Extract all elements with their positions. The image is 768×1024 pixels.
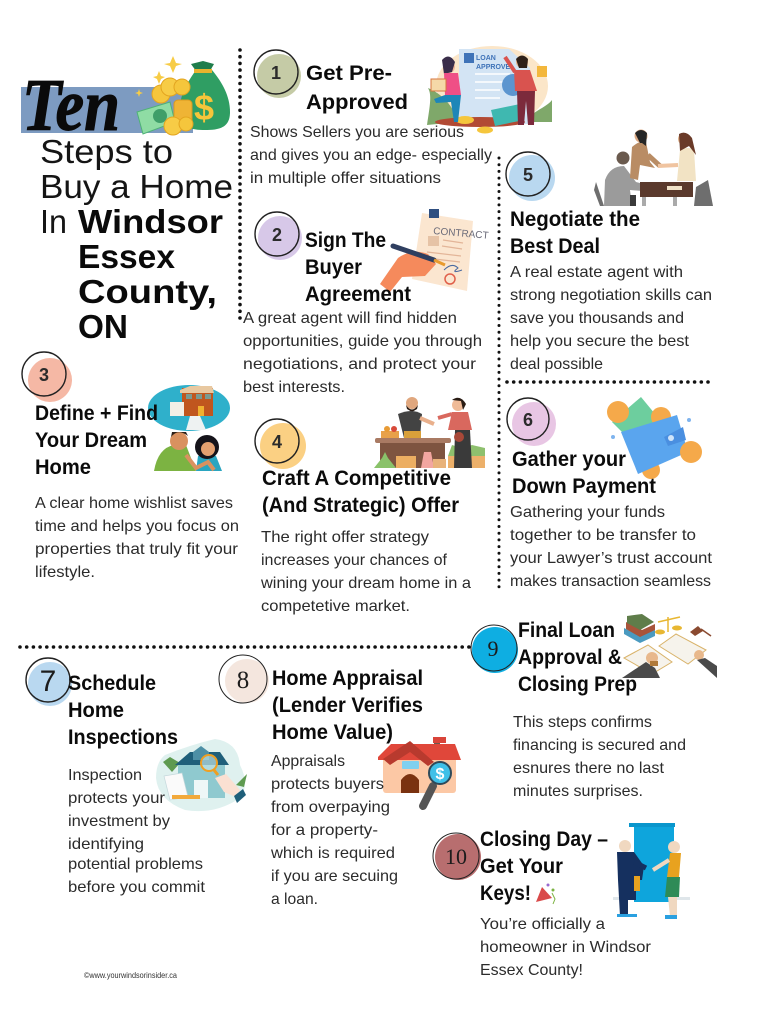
panel: step 6 <box>507 397 713 590</box>
body text: for a property- <box>271 822 378 839</box>
panel: title <box>21 56 233 345</box>
body text: strong negotiation skills can <box>510 287 712 304</box>
icon: handing over keys at the front door <box>613 823 690 919</box>
icon: party popper <box>536 884 555 904</box>
title text regular: In <box>40 203 67 240</box>
number badge 3 <box>22 352 72 402</box>
body text: potential problems <box>68 856 203 873</box>
icon: market stall negotiation <box>374 397 485 468</box>
heading <box>305 229 411 306</box>
body text: protects your <box>68 790 166 807</box>
icon: couple dreaming of a home <box>148 385 230 471</box>
title text regular: Steps to <box>40 133 173 170</box>
icon: wallet with coins and cash <box>607 397 702 479</box>
icon: legal documents, scales and gavel <box>622 614 717 678</box>
body text: your Lawyer’s trust account <box>510 550 713 567</box>
panel: step 2 <box>243 209 489 396</box>
body text <box>510 504 713 590</box>
panel: step 4 <box>255 397 485 615</box>
panel: step 3 <box>22 352 239 581</box>
heading: Schedule <box>68 672 156 695</box>
heading: Final Loan <box>518 619 615 642</box>
body text: increases your chances of <box>261 552 448 569</box>
panel: step 1 <box>250 46 552 187</box>
body text <box>510 264 712 373</box>
heading: Closing Prep <box>518 673 637 696</box>
body text: investment by <box>68 813 170 830</box>
heading: Best Deal <box>510 235 600 258</box>
body text: financing is secured and <box>513 737 686 754</box>
body text <box>513 714 686 800</box>
heading: Home <box>35 456 91 479</box>
heading: Define + Find <box>35 402 158 425</box>
heading <box>512 448 656 498</box>
body text: deal possible <box>510 356 603 373</box>
number badge 5 <box>506 152 555 201</box>
panel: step 10 <box>433 823 690 979</box>
body text: a loan. <box>271 891 318 908</box>
panel: step 7 <box>26 658 247 896</box>
icon: money bag and coins <box>135 56 230 135</box>
body text: Inspection <box>68 767 142 784</box>
heading: Craft A Competitive <box>262 467 451 490</box>
body text: and gives you an edge- especially <box>250 147 492 164</box>
body text: time and helps you focus on <box>35 518 239 535</box>
body text: You’re officially a <box>480 916 605 933</box>
body text <box>260 529 471 615</box>
body text <box>68 767 206 896</box>
heading: Down Payment <box>512 475 656 498</box>
number badge 9: 9 <box>488 636 498 661</box>
heading: Inspections <box>68 726 178 749</box>
heading: Your Dream <box>35 429 147 452</box>
heading: (And Strategic) Offer <box>262 494 459 517</box>
body text: Shows Sellers you are serious <box>250 124 464 141</box>
title text regular: Buy a Home <box>40 168 233 205</box>
heading <box>480 828 608 905</box>
heading: Buyer <box>305 256 362 279</box>
body text <box>270 753 398 908</box>
body text <box>35 495 239 581</box>
body text: competetive market. <box>261 598 410 615</box>
number badge 2: 2 <box>272 225 282 245</box>
title text bold location <box>78 203 223 345</box>
number badge 9 <box>471 625 518 673</box>
body text: which is required <box>270 845 395 862</box>
body text: help you secure the best <box>510 333 690 350</box>
footer website credit: ©www.yourwindsorinsider.ca <box>84 971 177 980</box>
number badge 4 <box>255 419 306 469</box>
heading: Gather your <box>512 448 626 471</box>
heading: Approval & <box>518 646 622 669</box>
heading <box>35 402 158 479</box>
body text: homeowner in Windsor <box>480 939 652 956</box>
body text: minutes surprises. <box>513 783 643 800</box>
body text: Appraisals <box>271 753 345 770</box>
heading <box>510 208 640 258</box>
heading: Negotiate the <box>510 208 640 231</box>
icon: loan approval <box>427 46 552 134</box>
heading: (Lender Verifies <box>272 694 423 717</box>
title highlight bar <box>21 87 193 133</box>
heading: Sign The <box>305 229 386 252</box>
body text: before you commit <box>68 879 206 896</box>
icon: home inspection <box>156 739 247 811</box>
body text <box>243 310 482 396</box>
heading <box>306 62 408 114</box>
number badge 1: 1 <box>271 63 281 83</box>
body text: save you thousands and <box>510 310 684 327</box>
body text: esnures there no last <box>513 760 665 777</box>
heading: Get Pre- <box>306 62 392 85</box>
panel: step 8 <box>219 655 461 908</box>
body text: negotiations, and protect your <box>243 356 477 373</box>
panel: step 5 <box>506 130 713 373</box>
heading <box>272 667 423 744</box>
panel: step 9 <box>471 614 717 800</box>
title text bold location: County, <box>78 273 217 310</box>
number badge 10 <box>433 833 481 880</box>
title text bold location: ON <box>78 308 128 345</box>
number badge 3: 3 <box>39 365 49 385</box>
icon: handshake at a table <box>594 130 713 206</box>
number badge 8 <box>219 655 269 703</box>
title text bold location: Essex <box>78 238 176 275</box>
number badge 7 <box>26 658 72 706</box>
body text <box>250 124 492 187</box>
script word Ten: Ten <box>22 65 120 147</box>
icon: contract signing: CONTRACT <box>433 226 489 242</box>
body text: opportunities, guide you through <box>243 333 482 350</box>
heading <box>262 467 459 517</box>
heading: Approved <box>306 91 408 114</box>
body text: properties that truly fit your <box>35 541 239 558</box>
number badge 4: 4 <box>272 432 282 452</box>
heading: Home Value) <box>272 721 393 744</box>
icon: money bag and coins: $ <box>194 87 214 128</box>
body text: A clear home wishlist saves <box>35 495 233 512</box>
title text bold location: Windsor <box>78 203 223 240</box>
body text: The right offer strategy <box>261 529 429 546</box>
number badge 6 <box>507 398 556 446</box>
heading: Home <box>68 699 124 722</box>
icon: contract signing <box>380 209 489 292</box>
number badge 5: 5 <box>523 165 533 185</box>
body text: Essex County! <box>480 962 583 979</box>
icon: loan approval: APPROVE <box>476 64 511 71</box>
body text: together to be transfer to <box>510 527 696 544</box>
heading: Keys! <box>480 882 531 905</box>
body text: A great agent will find hidden <box>243 310 457 327</box>
body text: wining your dream home in a <box>260 575 471 592</box>
body text: if you are secuing <box>271 868 398 885</box>
number badge 10: 10 <box>445 844 467 869</box>
heading: Get Your <box>480 855 563 878</box>
heading <box>68 672 178 749</box>
icon: house with dollar magnifier: $ <box>436 766 445 783</box>
body text <box>480 916 652 979</box>
icon: house with dollar magnifier <box>378 737 461 806</box>
body text: lifestyle. <box>35 564 95 581</box>
body text: best interests. <box>243 379 345 396</box>
number badge 8: 8 <box>237 667 249 694</box>
body text: identifying <box>68 836 144 853</box>
body text: This steps confirms <box>513 714 652 731</box>
body text: Gathering your funds <box>510 504 665 521</box>
heading: Closing Day – <box>480 828 608 851</box>
heading <box>518 619 637 696</box>
number badge 7: 7 <box>40 665 56 698</box>
number badge 1 <box>254 50 301 98</box>
body text: in multiple offer situations <box>250 170 441 187</box>
number badge 6: 6 <box>523 410 533 430</box>
body text: from overpaying <box>271 799 390 816</box>
icon: loan approval: LOAN <box>476 55 496 62</box>
body text: protects buyers <box>271 776 384 793</box>
body text: makes transaction seamless <box>510 573 711 590</box>
body text: A real estate agent with <box>510 264 683 281</box>
title text regular <box>40 133 233 240</box>
heading: Home Appraisal <box>272 667 423 690</box>
heading: Agreement <box>305 283 411 306</box>
number badge 2 <box>255 212 302 260</box>
